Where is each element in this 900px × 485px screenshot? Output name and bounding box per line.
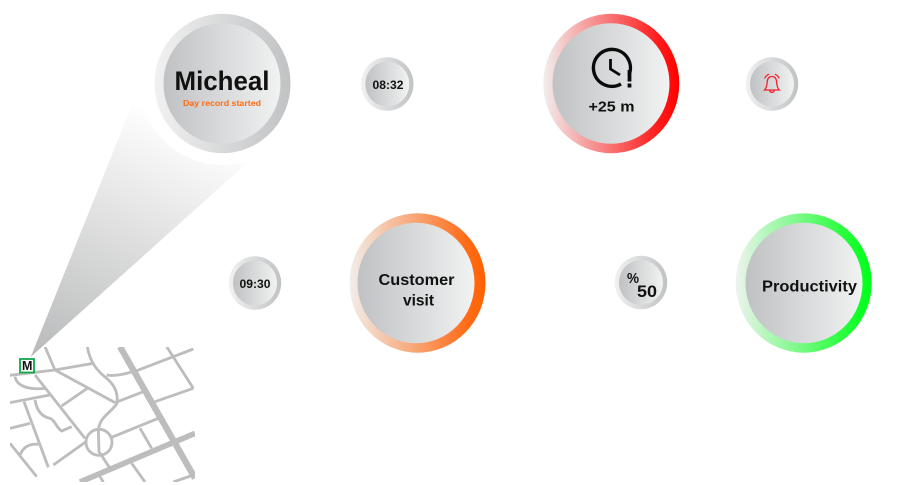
circle: Customer visit: Customer: [378, 272, 454, 289]
small circle: 09:30: [229, 256, 281, 310]
circle: Productivity: [736, 213, 872, 353]
circle: late +25 m: [543, 14, 679, 153]
circle: Micheal: [154, 14, 290, 153]
small circle: %50: [615, 256, 667, 309]
small circle: %50: 50: [637, 283, 657, 301]
small circle: bell alert: [746, 57, 798, 111]
circle: Micheal: Day record started: [183, 98, 261, 108]
icon: clock with alert: [593, 49, 630, 88]
icon: bell: [764, 74, 779, 92]
circle: Productivity: Productivity: [762, 278, 857, 296]
small circle: %50: %: [627, 270, 639, 287]
map: [10, 347, 195, 482]
circle: Customer visit: [350, 213, 486, 353]
circle: Customer visit: visit: [403, 292, 434, 310]
small circle: 09:30: 09:30: [240, 279, 270, 291]
map marker M: M: [22, 359, 32, 373]
circle: Micheal: Micheal: [174, 66, 270, 96]
small circle: 08:32: 08:32: [372, 80, 404, 92]
small circle: 08:32: [361, 57, 413, 111]
circle: late +25 m: +25 m: [588, 100, 634, 116]
spotlight beam: [31, 2, 303, 357]
